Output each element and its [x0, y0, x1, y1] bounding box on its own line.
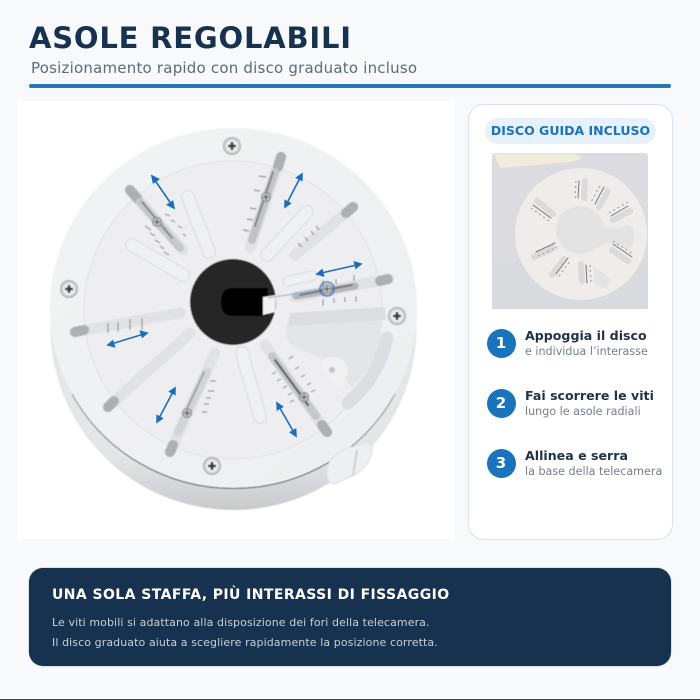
badge: disco guida incluso: DISCO GUIDA INCLUSO — [491, 123, 650, 138]
slot outer ends — [75, 157, 388, 452]
step 3 number: 3 — [496, 454, 506, 472]
banner text: Le viti mobili si adattano alla disposizione dei fori della telecamera. — [52, 616, 430, 629]
step 2 text: lungo le asole radiali — [525, 405, 641, 418]
centre hole — [190, 259, 276, 345]
step 1 number — [486, 329, 516, 358]
title: ASOLE REGOLABILI — [29, 21, 352, 55]
banner text — [52, 616, 438, 649]
disc hub and lobes — [556, 206, 634, 288]
device body — [50, 128, 417, 510]
banner text: Il disco graduato aiuta a scegliere rapidamente la posizione corretta. — [52, 636, 438, 649]
step 2 number: 2 — [496, 394, 506, 412]
footer line — [0, 699, 700, 700]
step 3 text: la base della telecamera — [525, 465, 662, 478]
step 3 number — [486, 449, 516, 478]
step 1 number: 1 — [496, 334, 506, 352]
step 1 text: e individua l’interasse — [525, 345, 648, 358]
badge: disco guida incluso — [485, 118, 656, 144]
slot screws — [152, 218, 162, 226]
graduation ticks — [108, 176, 356, 412]
banner heading: UNA SOLA STAFFA, PIÙ INTERASSI DI FISSAGGIO — [52, 587, 450, 603]
panel: guide card — [468, 104, 673, 540]
step 1 title: Appoggia il disco — [525, 328, 647, 343]
lower-right cutouts — [286, 318, 381, 388]
step 3 title: Allinea e serra — [525, 448, 628, 463]
step 2 number — [486, 389, 516, 418]
metal strips — [140, 172, 355, 432]
subtitle: Posizionamento rapido con disco graduato incluso — [31, 59, 417, 77]
disc guide photo — [492, 153, 648, 309]
housing screws — [224, 138, 240, 154]
header rule — [29, 84, 671, 88]
cable gland — [327, 443, 372, 484]
panel: summary banner — [29, 568, 671, 666]
adjustment arrows — [108, 174, 361, 436]
long radial slots — [75, 157, 388, 452]
step 2 title: Fai scorrere le viti — [525, 388, 654, 403]
panel: product photo — [17, 101, 455, 539]
short blank slots — [132, 197, 312, 417]
